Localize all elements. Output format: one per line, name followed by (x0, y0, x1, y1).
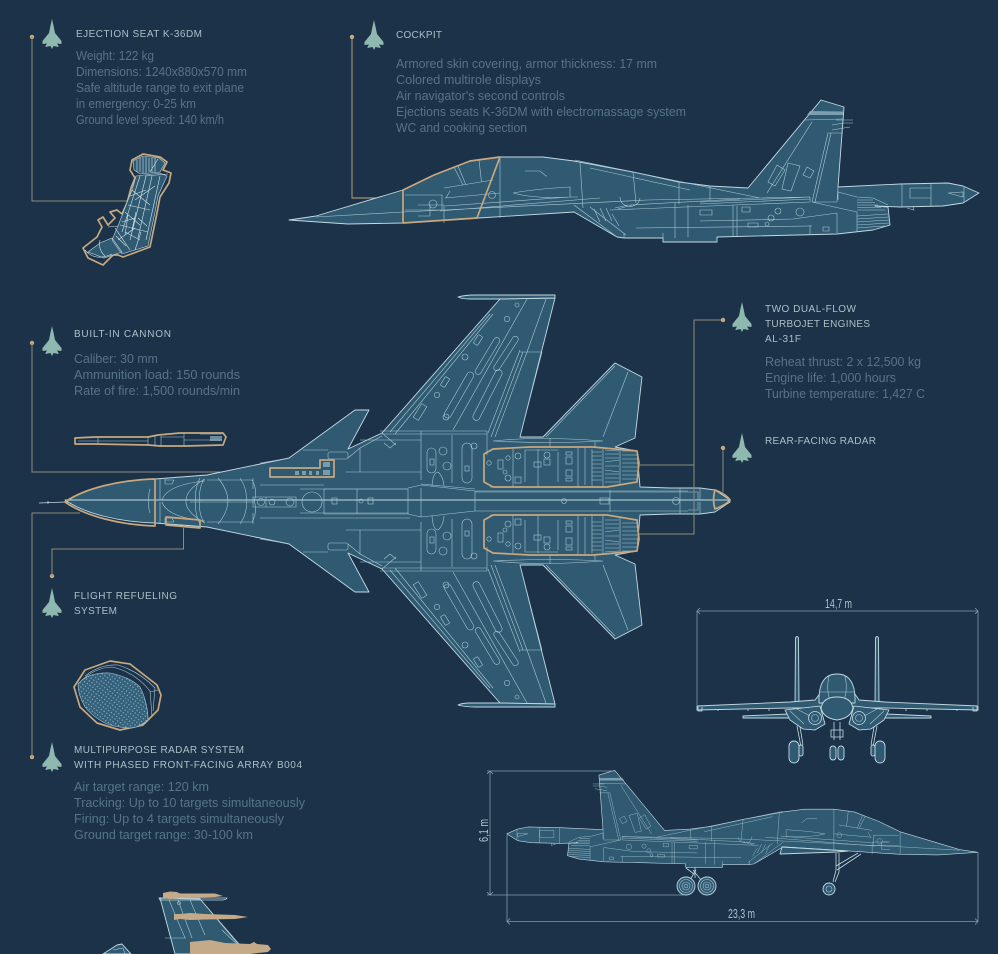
fins (795, 636, 879, 704)
dimension: height (487, 771, 684, 895)
text block: engines: TWO DUAL-FLOW (765, 304, 857, 315)
icon: ejection seat (42, 19, 62, 49)
text block: engines: AL-31F (765, 334, 801, 345)
pitot probe (39, 501, 65, 504)
text block: ejection seat: Safe altitude range to exit plane (76, 81, 244, 95)
engine leader dot (721, 318, 725, 322)
label: span: 14,7 m (825, 597, 852, 611)
text block: cockpit: WC and cooking section (396, 121, 527, 135)
text block: radar: Firing: Up to 4 targets simultaneously (74, 812, 285, 826)
intakes (785, 706, 889, 730)
dimension: length (507, 835, 978, 924)
radome and tail cone highlights (65, 479, 155, 526)
lower fuselage fairing (780, 847, 848, 854)
icon: engines (732, 302, 752, 332)
stabilizers (743, 714, 931, 718)
text block: cockpit: COCKPIT (396, 30, 442, 41)
refueling probe highlight (166, 517, 200, 528)
text block: cockpit: Colored multirole displays (396, 73, 541, 87)
heading: refueling: SYSTEM (74, 606, 117, 617)
icon: cockpit (364, 20, 384, 50)
cockpit highlight (403, 157, 500, 223)
side profile aircraft, top (289, 100, 979, 242)
text block: ejection seat: Ground level speed: 140 km/h (76, 113, 224, 127)
text block: cannon: Ammunition load: 150 rounds (74, 368, 240, 382)
cannon illustration (75, 433, 226, 446)
text block: radar: Ground target range: 30-100 km (74, 828, 253, 842)
dimension: span (697, 608, 978, 705)
heading: refueling (74, 591, 177, 617)
main aircraft, plan view (39, 295, 730, 707)
text block: cannon: BUILT-IN CANNON (74, 329, 171, 340)
weapons wing, bottom (103, 892, 271, 954)
text block: ejection seat (76, 29, 247, 127)
text block: radar (74, 745, 306, 842)
text block: engines: Reheat thrust: 2 x 12,500 kg (765, 355, 921, 369)
side view with dimensions (477, 770, 978, 924)
missile 3 (190, 940, 271, 954)
label: height: 6,1 m (477, 819, 491, 842)
main wings (697, 690, 978, 710)
front view with span dimension (697, 597, 978, 763)
text block: ejection seat: in emergency: 0-25 km (76, 97, 196, 111)
text block: cockpit: Armored skin covering, armor thickness: 17 mm (396, 57, 657, 71)
text block: cockpit (396, 30, 686, 135)
text block: radar: Tracking: Up to 10 targets simultaneously (74, 796, 306, 810)
wing tips and pylons (698, 706, 977, 711)
leader: refueling (50, 528, 183, 578)
icon: refueling (42, 588, 62, 618)
text block: ejection seat: Dimensions: 1240x880x570 mm (76, 65, 247, 79)
engine nacelle highlights (484, 447, 639, 487)
icon: rear radar (732, 433, 752, 463)
text block: ejection seat: Weight: 122 kg (76, 49, 154, 63)
rear radar leader dot (721, 446, 725, 450)
leader: ejection seat (30, 35, 127, 201)
text block: engines: Engine life: 1,000 hours (765, 371, 896, 385)
leader: radar (30, 513, 80, 759)
rear radar leader (722, 448, 724, 492)
heading: refueling: FLIGHT REFUELING (74, 591, 177, 602)
missile 1 (163, 892, 223, 899)
text block: radar: MULTIPURPOSE RADAR SYSTEM (74, 745, 244, 756)
text block: engines (765, 304, 925, 401)
text block: radar: Air target range: 120 km (74, 780, 209, 794)
centre spine details (253, 485, 475, 518)
leader: cannon (30, 341, 272, 472)
text block: engines: TURBOJET ENGINES (765, 319, 870, 330)
label: length: 23,3 m (728, 907, 755, 921)
text block: cockpit: Ejections seats K-36DM with electromassage system (396, 105, 686, 119)
leader: cockpit (350, 35, 404, 198)
missile 2 (174, 913, 248, 920)
icon: radar (42, 742, 62, 772)
nose landing gear (823, 853, 861, 895)
landing gear (789, 722, 885, 763)
text block: radar: WITH PHASED FRONT-FACING ARRAY B004 (74, 760, 302, 771)
cannon bay highlight (270, 460, 334, 477)
canopy (819, 674, 855, 703)
text block: cannon: Rate of fire: 1,500 rounds/min (74, 384, 240, 398)
radar antenna illustration (74, 661, 161, 730)
text block: cannon: Caliber: 30 mm (74, 352, 158, 366)
text block: cockpit: Air navigator's second controls (396, 89, 565, 103)
ejection seat illustration (83, 154, 171, 265)
text block: cannon (74, 329, 240, 398)
radome (821, 697, 853, 720)
icon: cannon (42, 326, 62, 356)
text block: engines: Turbine temperature: 1,427 C (765, 387, 925, 401)
text block: ejection seat: EJECTION SEAT K-36DM (76, 29, 202, 40)
engines branch leader (639, 320, 723, 534)
heading: rear radar: REAR-FACING RADAR (765, 436, 876, 447)
cannon bay details (295, 462, 330, 475)
main landing gear (677, 867, 716, 895)
